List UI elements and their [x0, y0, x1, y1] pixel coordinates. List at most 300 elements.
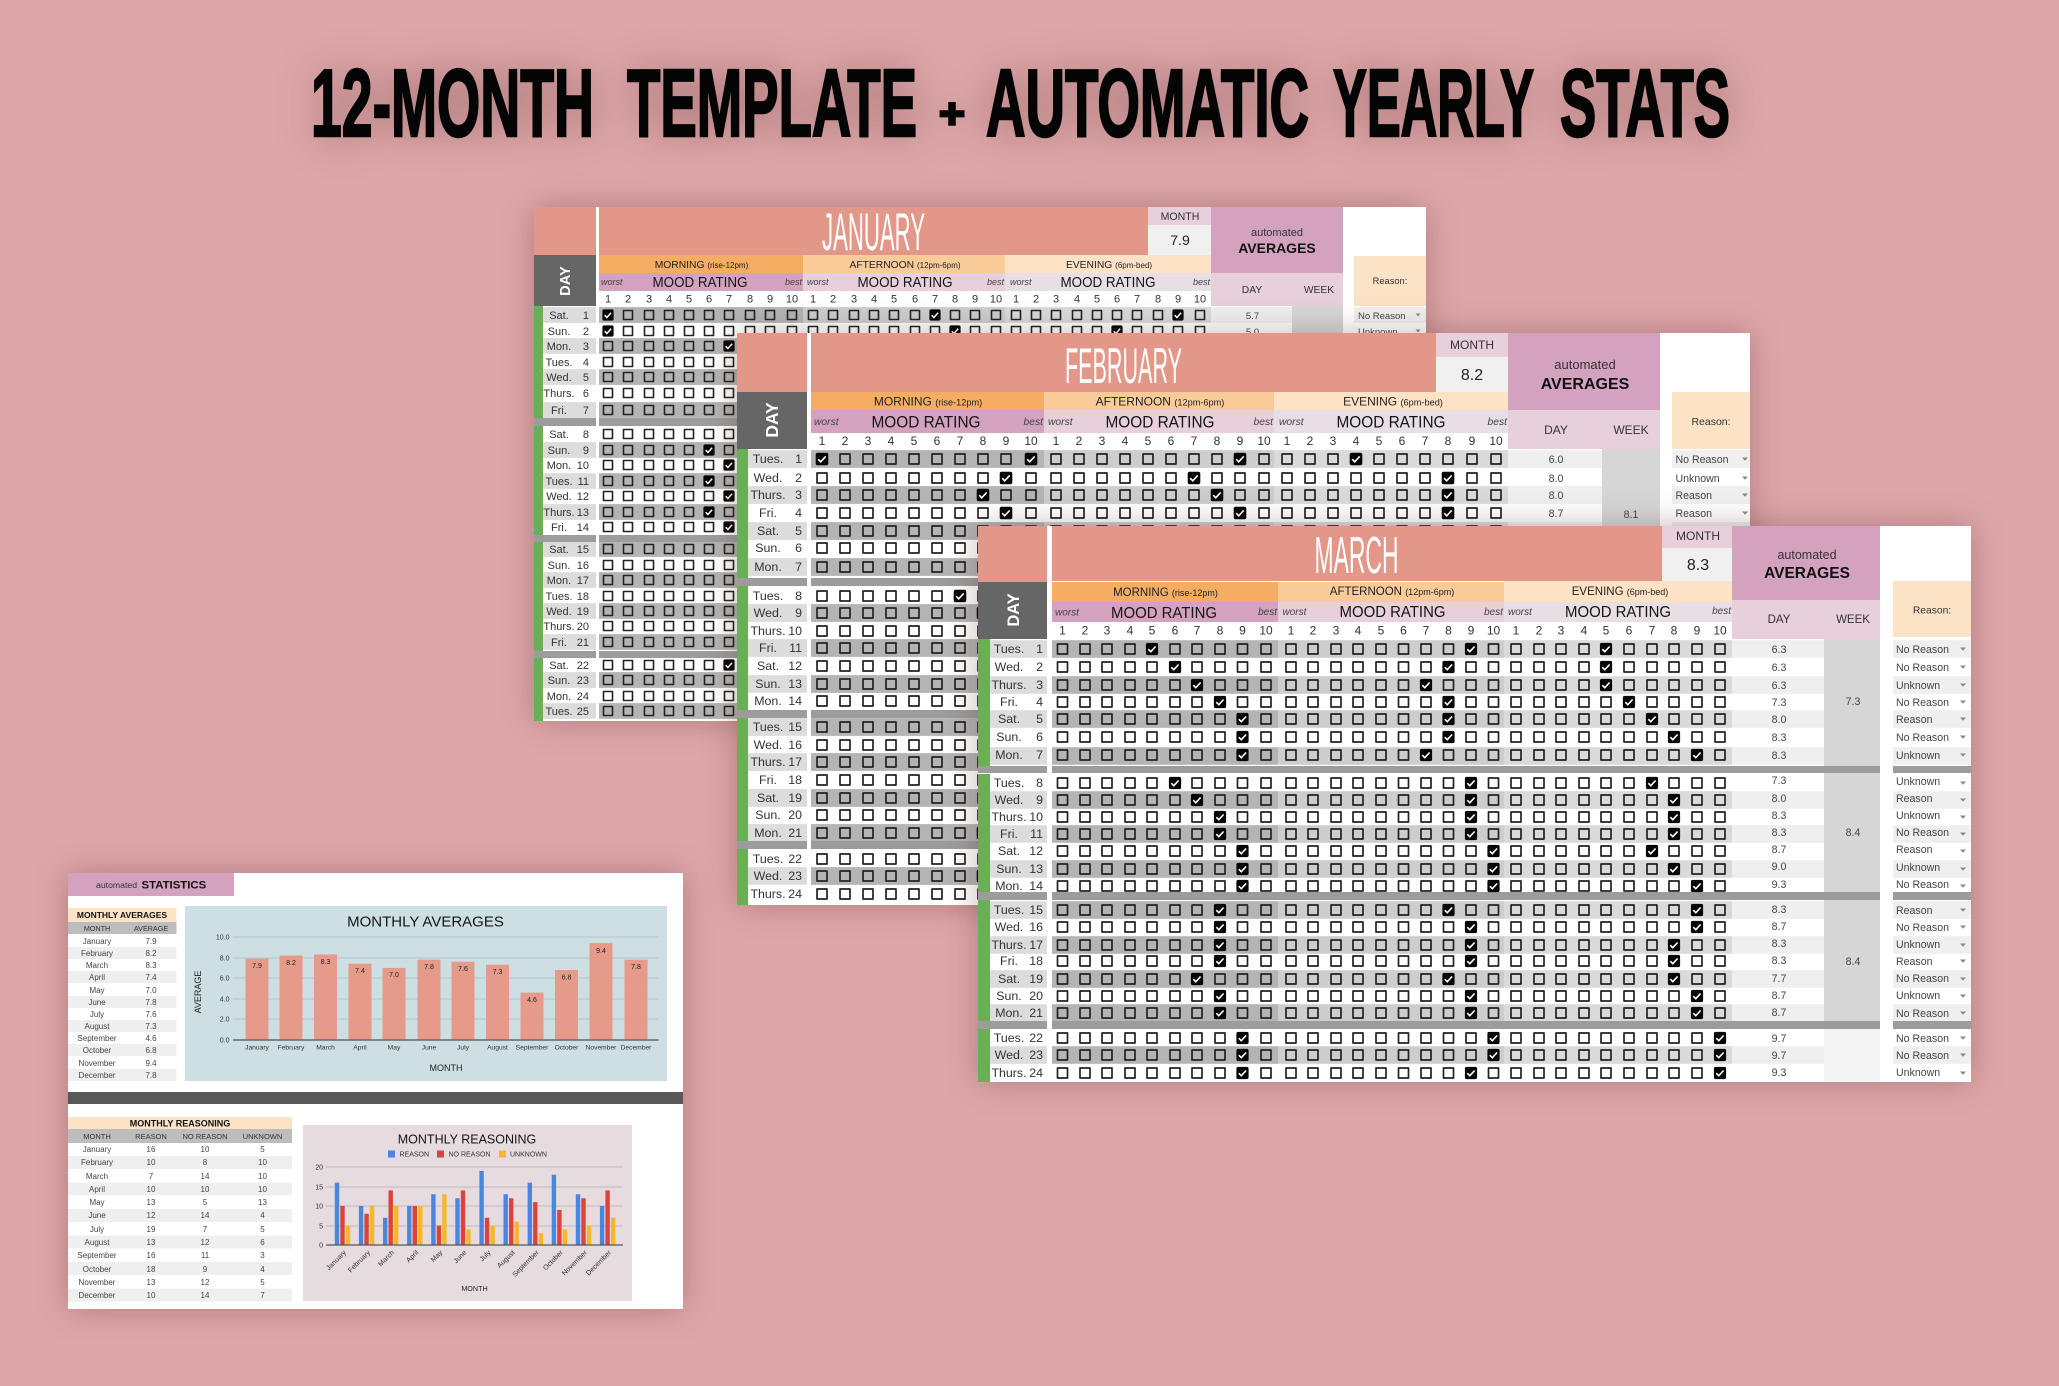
table: monthly averages: November	[79, 1059, 116, 1068]
January day values and reasons: No Reason	[1358, 311, 1406, 322]
table: monthly reasoning: 7	[203, 1225, 208, 1234]
table: monthly averages: 7.9	[145, 937, 157, 946]
table: monthly reasoning: 9	[203, 1265, 208, 1274]
March reason header	[1893, 581, 1971, 637]
January day labels: 19	[577, 606, 589, 618]
March day labels: Thurs.	[991, 1066, 1027, 1080]
table: monthly reasoning: 13	[147, 1278, 156, 1287]
January rating numbers: 10	[1194, 294, 1206, 306]
chart: monthly averages bars: 9.4	[596, 948, 606, 955]
February day labels: Tues.	[753, 452, 783, 466]
chart: monthly averages bars: MONTHLY AVERAGES	[347, 914, 504, 930]
March day and week averages: 6.3	[1772, 680, 1786, 692]
March reason dropdowns: No Reason	[1896, 644, 1949, 656]
February day labels: Fri.	[759, 506, 777, 520]
chart: monthly averages bars: August	[487, 1044, 508, 1052]
table: monthly averages: 8.3	[145, 961, 157, 970]
March day and week averages: 7.3	[1772, 775, 1786, 787]
January rating numbers: 9	[767, 294, 773, 306]
March mood rating headers: MOOD RATING	[1111, 605, 1217, 622]
chart: monthly averages bars: September	[516, 1044, 549, 1052]
March day and week averages: 9.7	[1772, 1033, 1786, 1045]
January day labels: 8	[583, 429, 589, 441]
chart: monthly averages bars: November	[586, 1044, 617, 1052]
chart: monthly averages bars: 7.0	[389, 972, 399, 979]
table: monthly averages: May	[89, 986, 105, 995]
March day and week averages: 8.7	[1772, 921, 1786, 933]
March day labels: Fri.	[1000, 827, 1018, 841]
January day labels: Mon.	[547, 691, 571, 703]
January reason header: Reason:	[1373, 276, 1407, 286]
February day labels: Sun.	[755, 541, 781, 555]
March automated averages header: WEEK	[1836, 614, 1870, 626]
March day labels: 7	[1036, 748, 1043, 762]
table: monthly averages: 8.2	[145, 949, 157, 958]
chart: monthly reasoning grouped bars: 15	[315, 1184, 323, 1192]
February day values and reasons: No Reason	[1676, 454, 1729, 466]
table: monthly reasoning: 14	[201, 1172, 210, 1181]
January rating numbers: 4	[871, 294, 877, 306]
January day values and reasons: 5.7	[1246, 311, 1259, 322]
March automated averages header: AVERAGES	[1764, 565, 1850, 582]
chart: monthly averages bars: 4.6	[527, 997, 537, 1004]
February day labels: 18	[788, 773, 802, 787]
table: monthly reasoning: 8	[203, 1158, 208, 1167]
March day labels: 20	[1029, 989, 1043, 1003]
January day labels: Sun.	[548, 675, 570, 687]
March reason dropdowns: No Reason	[1896, 922, 1949, 934]
March period headers: AFTERNOON (12pm-6pm)	[1330, 586, 1454, 598]
January day labels: Thurs.	[543, 507, 575, 519]
March mood rating headers: MOOD RATING	[1565, 604, 1671, 621]
January day labels: Thurs.	[543, 388, 575, 400]
March day labels: Sat.	[998, 844, 1020, 858]
March day labels: 14	[1029, 879, 1043, 893]
March day and week averages: 8.4	[1846, 956, 1860, 968]
January rating numbers: 10	[990, 294, 1002, 306]
table: monthly reasoning: 7	[149, 1172, 154, 1181]
January rating numbers: 5	[686, 294, 692, 306]
January day values and reasons: Unknown	[1358, 327, 1398, 338]
March day labels: 24	[1029, 1066, 1043, 1080]
chart: monthly averages bars: 0.0	[220, 1038, 230, 1044]
table: monthly averages: MONTHLY AVERAGES	[77, 910, 167, 920]
table: monthly reasoning: MONTHLY REASONING	[130, 1118, 230, 1128]
chart: monthly reasoning grouped bars: October	[542, 1249, 565, 1272]
table: monthly reasoning: April	[89, 1185, 105, 1194]
January mood rating headers: best	[1193, 277, 1210, 287]
March day labels: Mon.	[995, 879, 1023, 893]
February rating numbers: 8	[1214, 434, 1221, 448]
March day labels: Thurs.	[991, 938, 1027, 952]
January rating numbers: 6	[706, 294, 712, 306]
table: monthly averages: 7.3	[145, 1022, 157, 1031]
February day labels: 23	[788, 869, 802, 883]
February rating numbers: 4	[1122, 434, 1129, 448]
January mood rating headers: best	[785, 277, 802, 287]
February checkbox grid	[816, 453, 1748, 899]
chart: monthly averages bars: 7.8	[424, 964, 434, 971]
table: monthly reasoning: 12	[147, 1211, 156, 1220]
February day labels: Wed.	[754, 471, 782, 485]
January day labels: Tues.	[545, 591, 573, 603]
February month average: 8.2	[1461, 367, 1483, 384]
table: monthly reasoning: UNKNOWN	[243, 1132, 282, 1141]
March day and week averages: 9.3	[1772, 1067, 1786, 1079]
March rating numbers: 10	[1259, 624, 1273, 638]
March day labels: 2	[1036, 660, 1043, 674]
February automated averages header	[1508, 333, 1660, 449]
February day labels: 6	[795, 541, 802, 555]
title	[311, 50, 1730, 157]
February day labels: 8	[795, 589, 802, 603]
chart: monthly averages bars: 10.0	[216, 934, 230, 942]
January rating numbers: 9	[972, 294, 978, 306]
February mood rating headers: best	[1024, 417, 1044, 428]
March day and week averages: 9.0	[1772, 861, 1786, 873]
table: monthly reasoning: August	[85, 1238, 110, 1247]
March day labels: Tues.	[994, 903, 1024, 917]
January rating numbers: 2	[830, 294, 836, 306]
February day values and reasons: 6.0	[1549, 454, 1563, 466]
February rating numbers: 3	[865, 434, 872, 448]
table: monthly reasoning: 14	[201, 1211, 210, 1220]
March day labels: Thurs.	[991, 678, 1027, 692]
table: monthly reasoning: May	[89, 1198, 105, 1207]
March reason dropdowns: No Reason	[1896, 1008, 1949, 1020]
table: monthly reasoning: 10	[147, 1291, 156, 1300]
February day labels: 21	[788, 826, 802, 840]
March rating numbers: 7	[1649, 624, 1656, 638]
March day labels: 21	[1029, 1006, 1043, 1020]
February day labels: Sun.	[755, 808, 781, 822]
February rating numbers: 10	[1489, 434, 1503, 448]
January month average: MONTH	[1161, 211, 1199, 223]
chart: monthly averages bars: January	[245, 1044, 270, 1052]
chart: monthly averages bars: May	[388, 1044, 401, 1052]
February mood rating headers	[811, 410, 1508, 433]
table: monthly averages: July	[90, 1010, 104, 1019]
January day labels	[543, 310, 589, 718]
chart: monthly averages bars: February	[278, 1044, 305, 1052]
March day and week averages: 6.3	[1772, 644, 1786, 656]
March reason dropdowns: Unknown	[1896, 1067, 1940, 1079]
chart: monthly averages bars: 6.0	[220, 976, 230, 982]
table: monthly reasoning: July	[90, 1225, 104, 1234]
January month average: 7.9	[1170, 232, 1190, 248]
March day labels: 8	[1036, 776, 1043, 790]
January automated averages header: DAY	[1242, 285, 1262, 296]
January mood rating headers: worst	[1010, 277, 1032, 287]
March day labels: Tues.	[994, 642, 1024, 656]
panel: January sheet	[534, 203, 1426, 721]
February day labels	[750, 452, 802, 901]
January day labels: Fri.	[551, 522, 567, 534]
table: monthly averages: 7.8	[145, 1071, 157, 1080]
March day labels: 10	[1029, 810, 1043, 824]
table: monthly reasoning: 14	[201, 1291, 210, 1300]
table: monthly reasoning: 18	[147, 1265, 156, 1274]
February mood rating headers: MOOD RATING	[872, 414, 980, 432]
February day labels: Mon.	[754, 694, 782, 708]
chart: monthly averages bars: 4.0	[220, 996, 230, 1004]
January rating numbers: 7	[726, 294, 732, 306]
table: monthly averages: February	[81, 949, 113, 958]
chart: monthly averages bars: 6.8	[562, 974, 571, 982]
February day labels: 3	[795, 488, 802, 502]
March day header	[978, 582, 1047, 639]
February mood rating headers: best	[1488, 417, 1508, 428]
January day labels: 7	[583, 405, 589, 417]
February day header: DAY	[762, 402, 782, 438]
table: monthly reasoning: MONTH	[83, 1132, 111, 1141]
table: monthly reasoning: February	[81, 1158, 113, 1167]
January day values and reasons	[1246, 311, 1406, 338]
January day labels: 22	[577, 660, 589, 672]
March day labels: Sun.	[996, 862, 1022, 876]
title: AUTOMATIC	[986, 50, 1309, 157]
March rating numbers: 3	[1558, 624, 1565, 638]
February day labels: Sun.	[755, 677, 781, 691]
chart: monthly averages bars: 2.0	[220, 1016, 230, 1024]
chart: monthly averages bars: 8.2	[286, 960, 296, 967]
February rating numbers: 10	[1024, 434, 1038, 448]
February month average	[1436, 333, 1508, 392]
January rating numbers: 5	[1094, 294, 1100, 306]
February rating numbers: 2	[1076, 434, 1083, 448]
January rating numbers: 5	[891, 294, 897, 306]
January day labels: Sun.	[548, 560, 570, 572]
March rating numbers: 8	[1671, 624, 1678, 638]
table: monthly reasoning: June	[88, 1211, 106, 1220]
table: monthly reasoning: 10	[258, 1158, 267, 1167]
March rating numbers: 5	[1149, 624, 1156, 638]
February month average: MONTH	[1450, 338, 1494, 352]
table: monthly reasoning: 11	[201, 1251, 210, 1260]
February rating numbers: 2	[842, 434, 849, 448]
March day labels: 22	[1029, 1031, 1043, 1045]
February day labels: 15	[788, 720, 802, 734]
March day and week averages: 8.3	[1772, 810, 1786, 822]
January day labels: Tues.	[545, 706, 573, 718]
table: monthly reasoning: 5	[260, 1225, 265, 1234]
March day and week averages: 7.3	[1772, 697, 1786, 709]
March automated averages header: automated	[1777, 548, 1837, 562]
March rating numbers: 1	[1288, 624, 1295, 638]
March rating numbers: 7	[1423, 624, 1430, 638]
February automated averages header: WEEK	[1613, 423, 1649, 437]
February period headers	[811, 392, 1508, 410]
March day labels: Sat.	[998, 712, 1020, 726]
February day labels: Sat.	[757, 524, 779, 538]
March reason dropdowns: Reason	[1896, 714, 1933, 726]
March day and week averages: 8.3	[1772, 750, 1786, 762]
table: monthly averages: August	[85, 1022, 110, 1031]
table: monthly reasoning: September	[77, 1251, 117, 1260]
table: monthly reasoning: REASON	[135, 1132, 167, 1141]
chart: monthly averages bars: 7.4	[355, 968, 365, 975]
February day labels: 2	[795, 471, 802, 485]
March header band	[978, 526, 1662, 585]
February reason header	[1672, 392, 1750, 449]
February day labels: Fri.	[759, 641, 777, 655]
January row shading	[534, 306, 1426, 721]
March rating numbers: 6	[1626, 624, 1633, 638]
March day and week averages: 9.7	[1772, 1050, 1786, 1062]
March day and week averages: 8.0	[1772, 714, 1786, 726]
January mood rating headers: MOOD RATING	[858, 275, 952, 291]
February header band: FEBRUARY	[1065, 338, 1182, 394]
February day labels: 10	[788, 624, 802, 638]
February mood rating headers: best	[1254, 417, 1274, 428]
January rating numbers: 3	[646, 294, 652, 306]
February rating numbers: 9	[1237, 434, 1244, 448]
March reason dropdowns: No Reason	[1896, 732, 1949, 744]
chart: monthly reasoning grouped bars: September	[512, 1249, 541, 1279]
January day labels: 24	[577, 691, 589, 703]
March rating numbers: 8	[1445, 624, 1452, 638]
January day labels: 3	[583, 341, 589, 353]
January rating numbers: 6	[912, 294, 918, 306]
March day labels: Sun.	[996, 730, 1022, 744]
chart: monthly averages bars: October	[555, 1044, 579, 1052]
table: monthly averages: January	[83, 937, 111, 946]
February day values and reasons: Reason	[1676, 490, 1712, 502]
January day labels: 11	[578, 476, 589, 488]
March day labels	[991, 642, 1043, 1080]
March rating numbers: 8	[1217, 624, 1224, 638]
March day labels: 18	[1029, 954, 1043, 968]
title: TEMPLATE	[627, 50, 917, 157]
table: monthly reasoning: 6	[260, 1238, 265, 1247]
January mood rating headers: MOOD RATING	[652, 275, 748, 291]
March day and week averages: 8.4	[1846, 827, 1860, 839]
title: YEARLY	[1333, 50, 1534, 157]
table: monthly averages: AVERAGE	[134, 924, 168, 933]
February day labels: Thurs.	[750, 755, 786, 769]
chart: monthly reasoning grouped bars: June	[453, 1249, 468, 1265]
table: monthly reasoning: NO REASON	[182, 1132, 228, 1141]
chart: monthly averages bars: 7.6	[458, 966, 468, 973]
table: monthly averages: December	[79, 1071, 116, 1080]
chart: monthly averages bars: 7.8	[631, 964, 641, 971]
February day values and reasons: 8.0	[1549, 490, 1563, 502]
table: monthly averages: September	[77, 1034, 117, 1043]
table: monthly reasoning: 7	[260, 1291, 265, 1300]
table: monthly reasoning: 5	[260, 1145, 265, 1154]
March day labels: 23	[1029, 1048, 1043, 1062]
table: monthly averages: 7.8	[145, 998, 157, 1007]
January day header: DAY	[558, 266, 574, 296]
February rating numbers: 1	[819, 434, 826, 448]
March day and week averages: 9.3	[1772, 879, 1786, 891]
February day labels: 24	[788, 887, 802, 901]
March day and week averages: 8.7	[1772, 844, 1786, 856]
March day labels: Wed.	[995, 660, 1023, 674]
March reason dropdowns: No Reason	[1896, 973, 1949, 985]
March day labels: 5	[1036, 712, 1043, 726]
January reason header	[1354, 256, 1426, 306]
March automated averages header: DAY	[1768, 614, 1791, 626]
January rating numbers: 8	[747, 294, 753, 306]
March rating numbers: 4	[1355, 624, 1362, 638]
table: monthly reasoning: 16	[147, 1251, 156, 1260]
February day header	[737, 392, 807, 449]
February rating numbers: 6	[1399, 434, 1406, 448]
January rating numbers: 1	[1013, 294, 1019, 306]
chart: monthly averages bars: 7.9	[252, 963, 262, 970]
chart: monthly reasoning grouped bars: January	[325, 1249, 348, 1272]
January day labels: Tues.	[545, 476, 573, 488]
February rating numbers: 1	[1284, 434, 1291, 448]
table: monthly reasoning: 10	[201, 1185, 210, 1194]
chart: monthly reasoning grouped bars: MONTH	[461, 1284, 488, 1293]
March reason dropdowns: No Reason	[1896, 879, 1949, 891]
February day values and reasons: 8.0	[1549, 473, 1563, 485]
February day labels: 1	[795, 452, 802, 466]
March day labels: 6	[1036, 730, 1043, 744]
February row shading	[737, 449, 1750, 905]
table: monthly reasoning: November	[79, 1278, 116, 1287]
February day labels: 11	[789, 641, 802, 655]
table: monthly averages: 7.6	[145, 1010, 157, 1019]
February automated averages header: DAY	[1544, 423, 1568, 437]
January rating numbers: 2	[625, 294, 631, 306]
February day values and reasons: 8.7	[1549, 508, 1563, 520]
January day labels: Sun.	[548, 326, 570, 338]
March day and week averages: 7.7	[1772, 973, 1786, 985]
January period headers	[599, 255, 1211, 273]
February rating numbers: 1	[1053, 434, 1060, 448]
February rating numbers: 7	[957, 434, 964, 448]
March mood rating headers	[1052, 602, 1732, 622]
February day values and reasons: Reason	[1676, 508, 1712, 520]
table: monthly reasoning: 19	[147, 1225, 156, 1234]
February automated averages header: automated	[1554, 357, 1616, 372]
February period headers: AFTERNOON (12pm-6pm)	[1096, 394, 1224, 408]
January rating numbers: 4	[666, 294, 672, 306]
February mood rating headers: MOOD RATING	[1106, 414, 1214, 432]
table: monthly reasoning: 12	[201, 1238, 210, 1247]
February day labels: Sat.	[757, 659, 779, 673]
table: monthly reasoning	[68, 1117, 292, 1302]
March rating numbers: 3	[1104, 624, 1111, 638]
March day labels: 17	[1029, 938, 1043, 952]
March rating numbers: 5	[1603, 624, 1610, 638]
March automated averages header	[1732, 526, 1880, 639]
February day labels: Wed.	[754, 738, 782, 752]
chart: monthly averages bars: April	[353, 1044, 367, 1052]
March day labels: Mon.	[995, 1006, 1023, 1020]
February day labels: 5	[795, 524, 802, 538]
February mood rating headers: worst	[814, 417, 840, 428]
title: STATS	[1560, 50, 1730, 157]
table: monthly reasoning: December	[79, 1291, 116, 1300]
January header band: JANUARY	[822, 203, 925, 262]
March rating numbers: 9	[1694, 624, 1701, 638]
February reason header: Reason:	[1691, 416, 1731, 428]
March day and week averages: 8.0	[1772, 793, 1786, 805]
February mood rating headers: worst	[1048, 417, 1074, 428]
February rating numbers: 8	[1445, 434, 1452, 448]
March reason dropdowns: Unknown	[1896, 990, 1940, 1002]
table: monthly reasoning: 4	[260, 1265, 265, 1274]
title: +	[939, 90, 965, 137]
January month average	[1148, 207, 1211, 255]
March rating numbers: 2	[1082, 624, 1089, 638]
chart: monthly reasoning grouped bars: August	[496, 1249, 517, 1270]
January mood rating headers	[599, 273, 1211, 291]
